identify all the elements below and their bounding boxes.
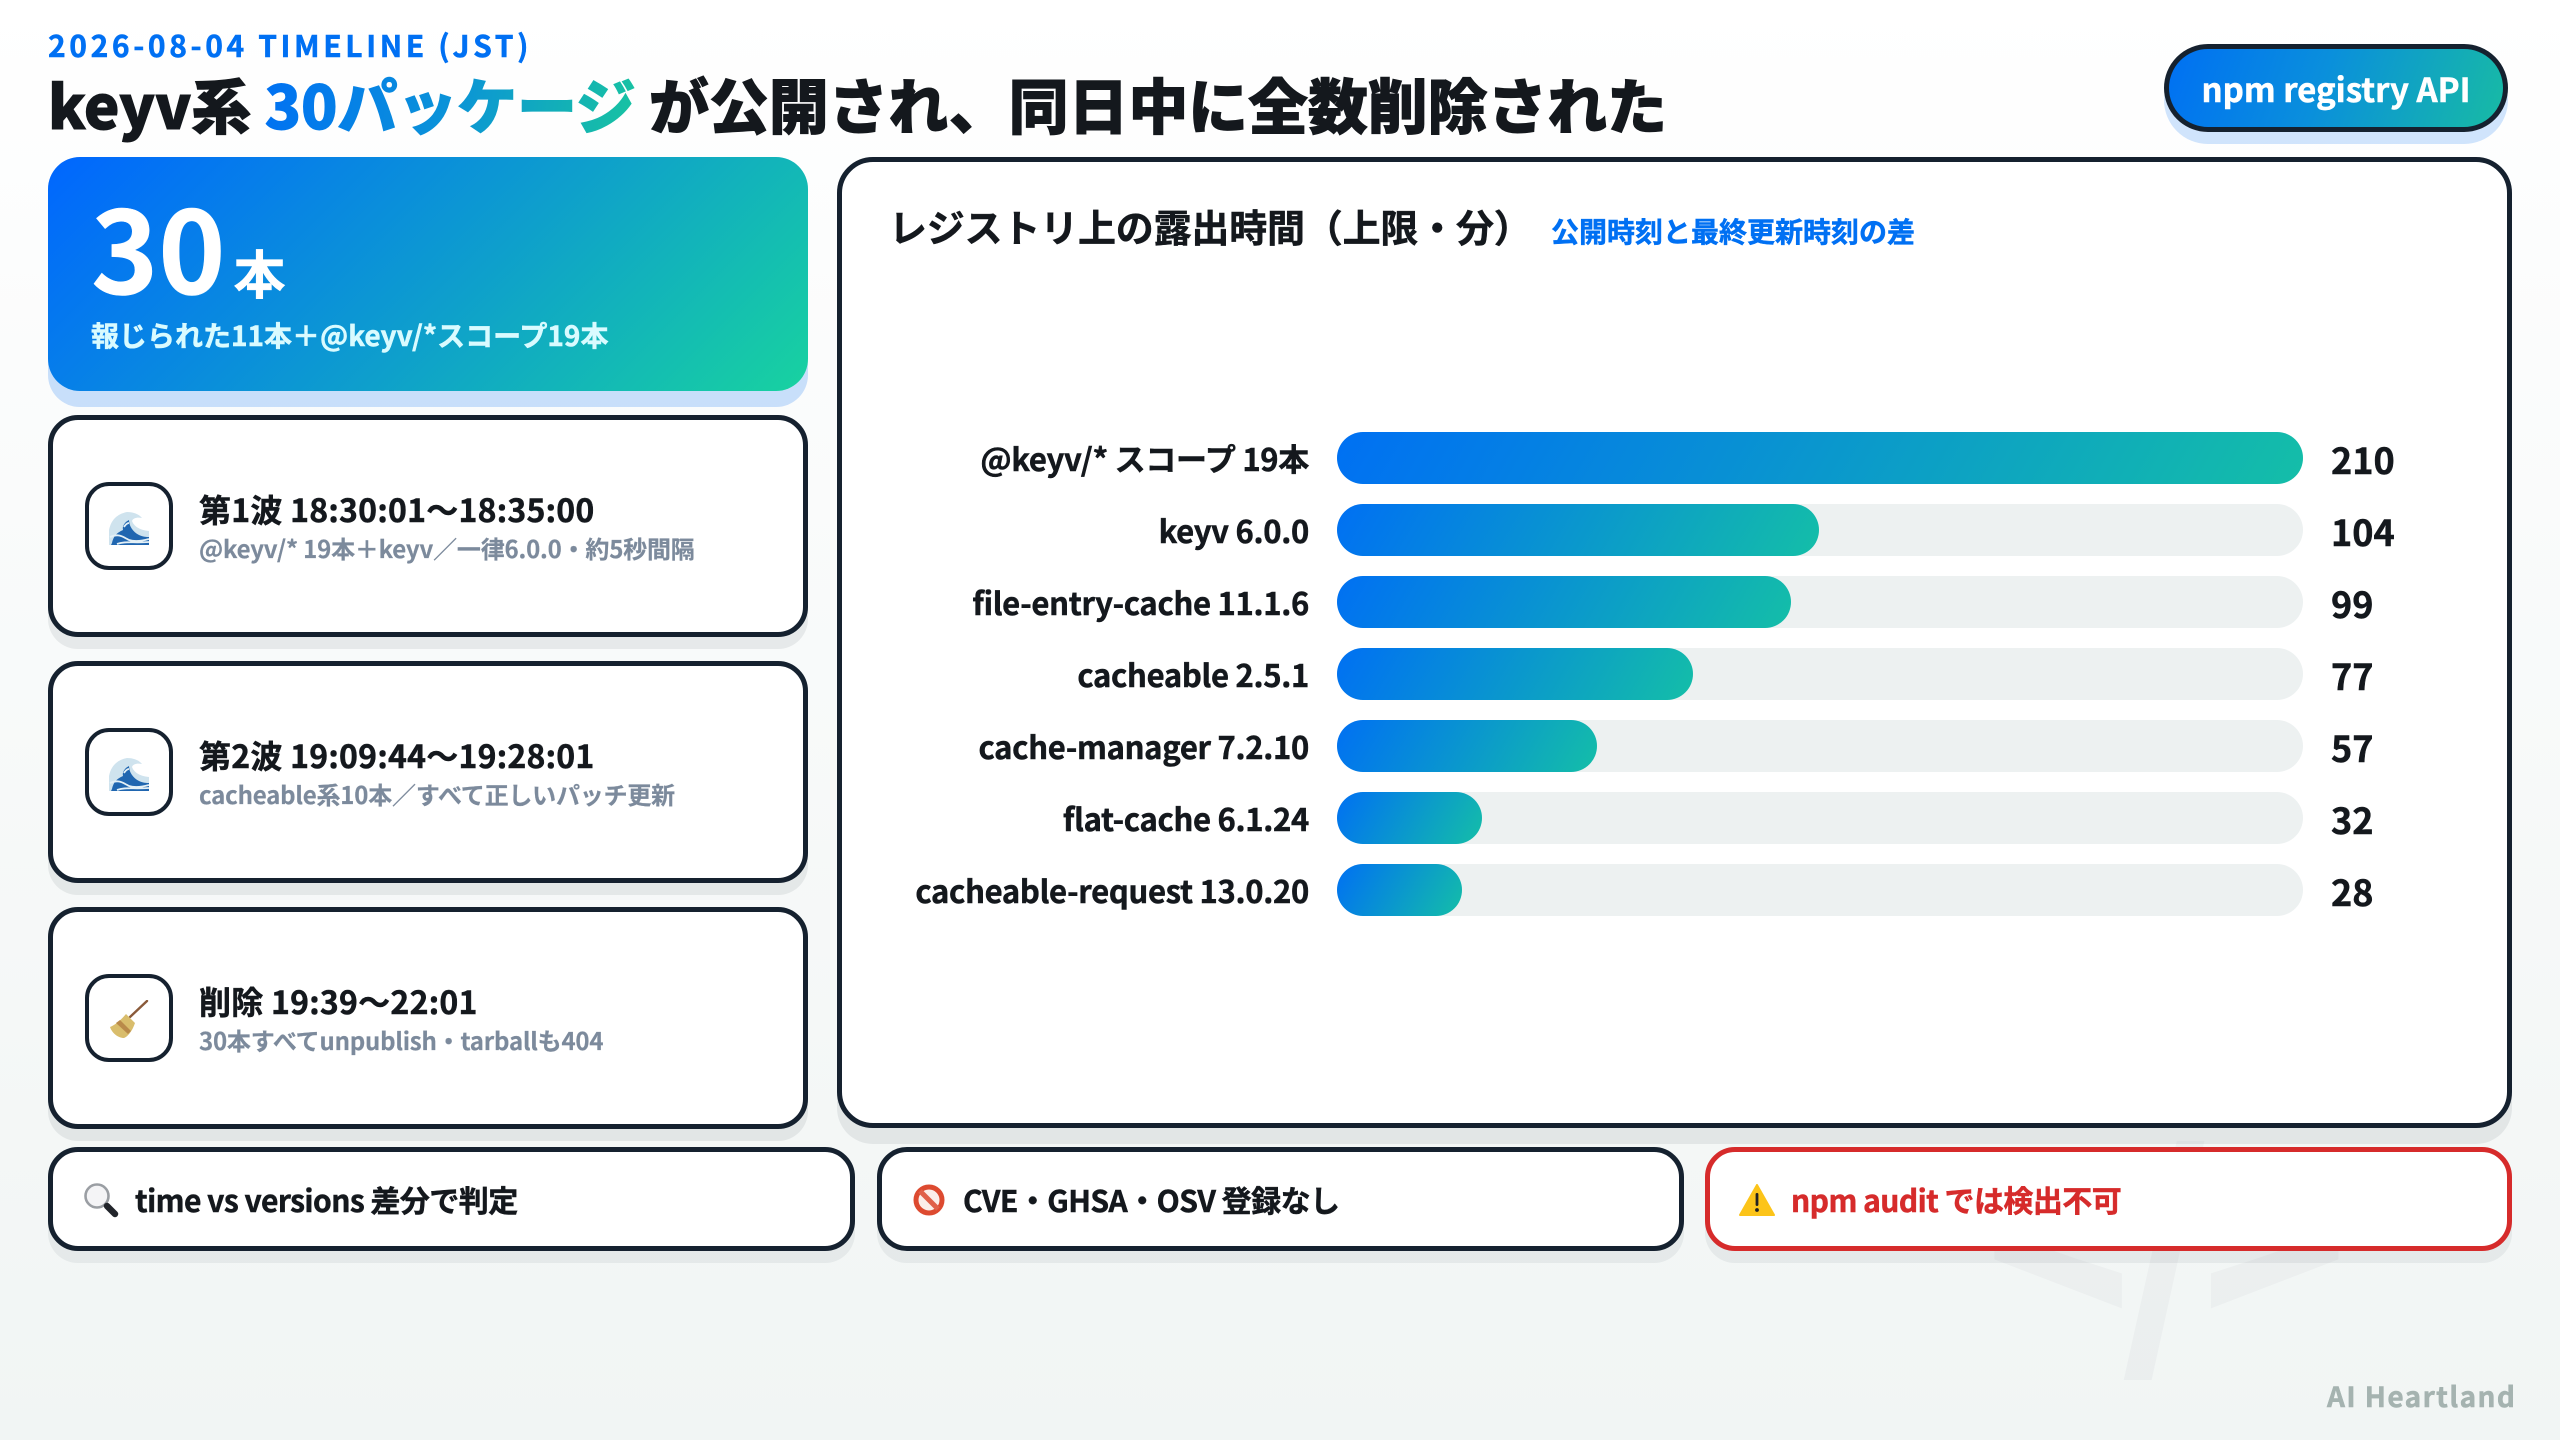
footer brand: AI Heartland	[2327, 1376, 2516, 1416]
bar: cacheable: 77	[2331, 649, 2373, 701]
panel: wave 2	[48, 661, 808, 883]
wave 2 heading: 第2波 19:09:44〜19:28:01	[199, 732, 595, 778]
icon: wave	[85, 482, 173, 570]
badge: npm registry API	[2164, 44, 2508, 132]
bar: keyv	[1159, 504, 2395, 557]
removal heading: 削除 19:39〜22:01	[199, 978, 478, 1024]
hero number: 30本	[91, 162, 286, 327]
callout: no CVE registration	[877, 1147, 1684, 1251]
wave 2 detail: cacheable系10本／すべて正しいパッチ更新	[199, 776, 675, 811]
panel: exposure time chart	[837, 157, 2512, 1128]
bar: flat-cache	[1063, 792, 2373, 845]
bar: cacheable-request: cacheable-request 13.0.20	[915, 867, 1309, 912]
callout text: npm audit では検出不可	[1791, 1177, 2121, 1221]
bar: cache-manager: cache-manager 7.2.10	[978, 723, 1309, 768]
icon: prohibited	[914, 1184, 944, 1216]
bar: file-entry-cache	[972, 576, 2373, 629]
panel: wave 1	[48, 415, 808, 637]
callout text: time vs versions 差分で判定	[135, 1177, 518, 1221]
wave 1 heading: 第1波 18:30:01〜18:35:00	[199, 486, 595, 532]
badge: npm registry API: npm registry API	[2201, 64, 2471, 112]
bar: keyv: 104	[2331, 505, 2395, 557]
bar: cacheable-request: 28	[2331, 865, 2373, 917]
chart subtitle: 公開時刻と最終更新時刻の差	[1551, 211, 1915, 251]
watermark: code glyph: </>	[1985, 1059, 2337, 1406]
bar: file-entry-cache: file-entry-cache 11.1.6	[972, 579, 1309, 624]
bar: cacheable: cacheable 2.5.1	[1077, 651, 1309, 696]
bar: cacheable-request	[915, 864, 2373, 917]
eyebrow label: 2026-08-04 TIMELINE (JST)	[48, 22, 532, 66]
title: keyv系 30パッケージ が公開され、同日中に全数削除された	[48, 60, 1667, 147]
bar: flat-cache: 32	[2331, 793, 2373, 845]
bar: @keyv/* scope	[980, 432, 2395, 485]
panel: total count hero	[48, 157, 808, 391]
callout text: CVE・GHSA・OSV 登録なし	[963, 1177, 1339, 1221]
panel: removal	[48, 907, 808, 1129]
hero caption: 報じられた11本＋@keyv/*スコープ19本	[91, 315, 608, 355]
chart heading: レジストリ上の露出時間（上限・分）	[889, 198, 1532, 253]
icon: wave	[85, 728, 173, 816]
bar chart	[915, 432, 2395, 917]
icon: broom	[85, 974, 173, 1062]
callout: npm audit warning	[1705, 1147, 2512, 1251]
wave 1 detail: @keyv/* 19本＋keyv／一律6.0.0・約5秒間隔	[199, 530, 695, 565]
icon: magnifier	[84, 1183, 118, 1218]
bar: @keyv/* scope: 210	[2331, 433, 2395, 485]
bar: cacheable	[1077, 648, 2373, 701]
callout: time vs versions	[48, 1147, 855, 1251]
removal detail: 30本すべてunpublish・tarballも404	[199, 1022, 603, 1057]
bar: @keyv/* scope: @keyv/* スコープ 19本	[980, 435, 1309, 480]
bar: cache-manager	[978, 720, 2373, 773]
bar: flat-cache: flat-cache 6.1.24	[1063, 795, 1309, 840]
bar: file-entry-cache: 99	[2331, 577, 2373, 629]
icon: warning	[1739, 1184, 1775, 1216]
bar: cache-manager: 57	[2331, 721, 2373, 773]
bar: keyv: keyv 6.0.0	[1159, 507, 1309, 552]
